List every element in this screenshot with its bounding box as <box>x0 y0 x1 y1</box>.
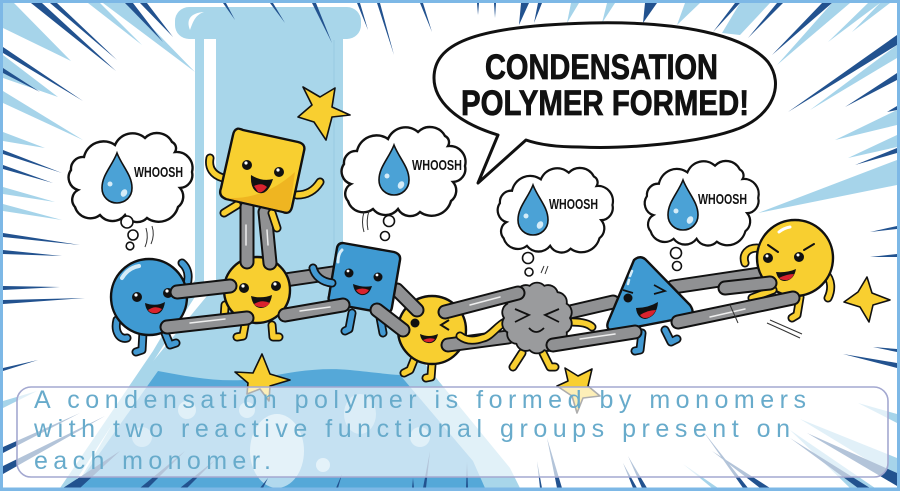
thought cloud 3 <box>498 168 613 276</box>
bubble text line 2: POLYMER FORMED! <box>461 84 749 123</box>
monomer: yellow winking circle <box>398 296 466 378</box>
vertical chain links <box>246 207 270 263</box>
star: upper <box>298 87 350 140</box>
star: right <box>844 277 890 322</box>
whoosh: WHOOSH <box>698 191 747 208</box>
water drop <box>379 145 409 195</box>
monomer: gray gear <box>460 283 592 367</box>
monomer: yellow square <box>210 129 320 228</box>
bubble text line 1: CONDENSATION <box>485 48 718 87</box>
caption line 2: with two reactive functional groups present on <box>33 415 790 443</box>
flask <box>60 7 520 488</box>
whoosh: WHOOSH <box>412 157 462 174</box>
monomer: blue square <box>313 243 400 333</box>
monomer: blue circle <box>111 259 188 352</box>
thought cloud 4 <box>645 161 759 270</box>
caption line 1: A condensation polymer is formed by monomers <box>34 386 806 414</box>
water drop <box>518 185 548 235</box>
monomer: yellow circle <box>224 257 290 337</box>
monomer: determined yellow circle <box>744 220 833 318</box>
whoosh: WHOOSH <box>134 164 183 181</box>
caption panel <box>17 386 888 477</box>
monomer: blue triangle <box>607 257 693 351</box>
chain links in front of monomers <box>167 283 793 345</box>
thought cloud 1 <box>69 133 193 250</box>
star: lower left <box>235 354 290 401</box>
thought cloud 2 <box>342 127 466 240</box>
whoosh: WHOOSH <box>549 196 598 213</box>
star: lower middle <box>557 368 600 413</box>
caption line 3: each monomer. <box>34 447 271 475</box>
motion lines <box>730 305 802 338</box>
chain links behind monomers <box>285 273 767 312</box>
water drop <box>102 153 132 203</box>
water drop <box>668 180 698 230</box>
link into winking monomer <box>397 290 417 310</box>
speech bubble <box>434 23 775 183</box>
lower link to gear <box>448 337 508 345</box>
